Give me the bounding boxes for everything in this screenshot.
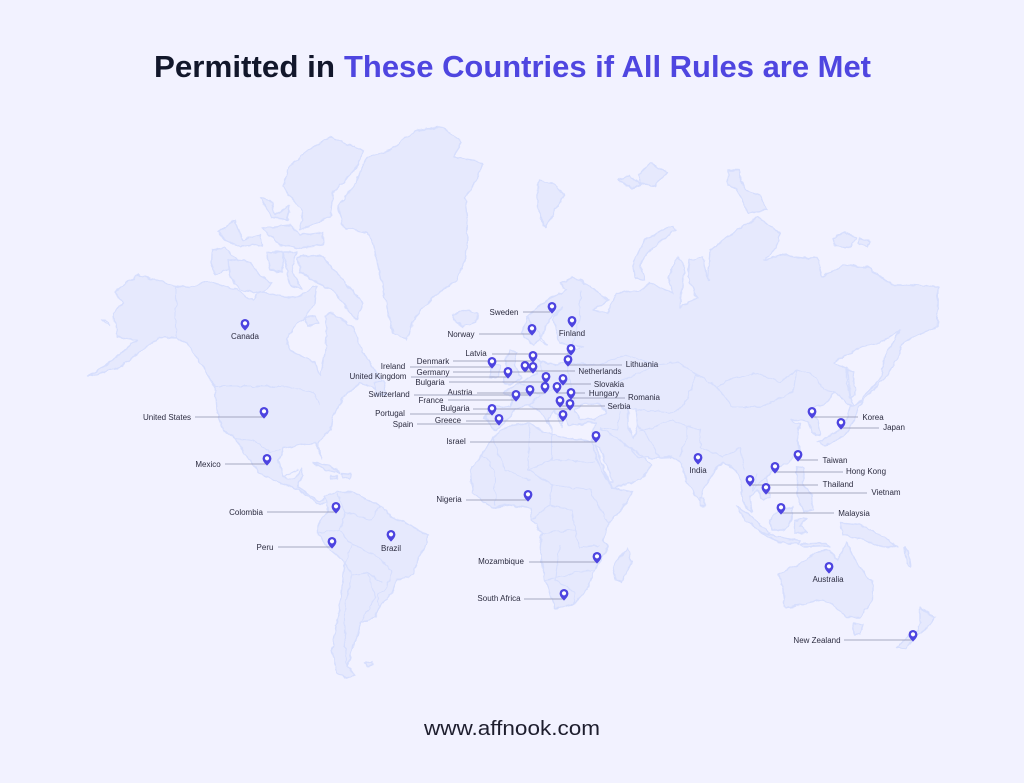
marker: Denmark <box>417 351 537 366</box>
marker: Mozambique <box>478 552 601 566</box>
marker: India: India <box>689 466 707 475</box>
marker: Sweden <box>490 302 556 317</box>
marker: Brazil: Brazil <box>381 544 401 553</box>
marker: Colombia: Colombia <box>229 508 263 517</box>
marker: Thailand: Thailand <box>823 480 853 489</box>
marker: Portugal <box>375 404 496 418</box>
marker: Germany: Germany <box>417 368 449 377</box>
marker: Brazil <box>381 530 401 553</box>
landmass: Southeast Asia islands <box>700 467 911 567</box>
marker: Taiwan: Taiwan <box>823 456 847 465</box>
marker: Malaysia: Malaysia <box>838 509 870 518</box>
marker: Korea: Korea <box>862 413 884 422</box>
landmass: Madagascar <box>613 548 631 582</box>
marker: Lithuania: Lithuania <box>626 360 659 369</box>
marker: Colombia <box>229 502 340 517</box>
marker: New Zealand <box>793 630 917 645</box>
marker: Portugal: Portugal <box>375 409 405 418</box>
marker: Japan <box>837 418 905 432</box>
marker: Thailand <box>746 475 853 489</box>
marker: Spain: Spain <box>393 420 413 429</box>
marker: Korea <box>808 407 884 422</box>
landmass: Falkland Islands <box>365 662 373 666</box>
marker: Bulgaria: Bulgaria <box>415 378 445 387</box>
marker: Finland: Finland <box>559 329 585 338</box>
marker: Vietnam <box>762 483 901 497</box>
marker: Mexico <box>195 454 271 469</box>
marker: Finland <box>559 316 585 338</box>
landmass: European and northern islands <box>453 163 870 398</box>
landmass: Baffin Island and Arctic islands <box>102 137 386 479</box>
marker: South Africa <box>477 589 568 603</box>
marker: Lithuania <box>564 355 659 369</box>
marker: Peru: Peru <box>257 543 273 552</box>
landmass: New Zealand <box>897 607 935 648</box>
marker: Mexico: Mexico <box>195 460 221 469</box>
marker: Netherlands <box>521 361 622 376</box>
water: Caspian Sea <box>628 407 638 438</box>
marker: Israel: Israel <box>446 437 466 446</box>
landmass: Tasmania <box>853 624 863 635</box>
water: Sea of Okhotsk <box>833 330 900 407</box>
marker: Slovakia <box>559 374 625 389</box>
marker: Canada <box>231 319 260 341</box>
marker: Serbia: Serbia <box>607 402 631 411</box>
country borders <box>176 286 835 667</box>
marker: Switzerland <box>368 385 534 399</box>
marker: United States <box>143 407 268 422</box>
marker: Vietnam: Vietnam <box>871 488 901 497</box>
marker: Latvia <box>465 344 575 358</box>
marker: Canada: Canada <box>231 332 260 341</box>
landmass: South America <box>318 492 428 678</box>
marker: Serbia <box>556 396 631 411</box>
marker: Bulgaria <box>440 399 574 413</box>
marker: Taiwan <box>794 450 847 465</box>
marker: Sweden: Sweden <box>490 308 518 317</box>
title: Permitted in <box>154 49 335 84</box>
water: Black Sea <box>575 403 607 419</box>
landmass: North and Central America <box>87 275 385 505</box>
marker: Norway: Norway <box>447 330 475 339</box>
marker: Spain <box>393 414 503 429</box>
marker: Switzerland: Switzerland <box>368 390 410 399</box>
marker: Mozambique: Mozambique <box>478 557 524 566</box>
world map <box>87 127 938 678</box>
marker: Peru <box>257 537 336 552</box>
marker: Nigeria <box>436 490 532 504</box>
marker: India <box>689 453 707 475</box>
marker: Norway <box>447 324 536 339</box>
marker: France: France <box>419 396 444 405</box>
marker: Germany <box>417 362 537 377</box>
marker: Australia <box>812 562 844 584</box>
footer url: www.affnook.com <box>423 718 600 740</box>
marker: Israel <box>446 431 600 446</box>
landmass: Africa <box>470 423 633 608</box>
marker: Hong Kong: Hong Kong <box>846 467 886 476</box>
marker: Denmark: Denmark <box>417 357 450 366</box>
landmass: Greenland <box>338 127 482 340</box>
title: These Countries if All Rules are Met <box>344 49 871 84</box>
marker: Austria: Austria <box>448 388 473 397</box>
landmass: Japan <box>818 400 863 445</box>
marker: Hong Kong <box>771 462 886 476</box>
marker: Australia: Australia <box>812 575 844 584</box>
marker: Japan: Japan <box>883 423 905 432</box>
marker: Bulgaria: Bulgaria <box>440 404 470 413</box>
marker: Romania <box>567 388 661 402</box>
marker: Greece <box>435 410 567 425</box>
marker: Ireland <box>381 357 496 371</box>
landmass: Eurasia <box>485 217 938 513</box>
marker: Bulgaria <box>415 372 550 387</box>
marker: Ireland: Ireland <box>381 362 405 371</box>
marker: Slovakia: Slovakia <box>594 380 625 389</box>
marker: United Kingdom: United Kingdom <box>350 372 407 381</box>
marker: Malaysia <box>777 503 870 518</box>
marker: Nigeria: Nigeria <box>436 495 462 504</box>
marker: Hungary: Hungary <box>589 389 619 398</box>
marker: United States: United States <box>143 413 191 422</box>
marker: South Africa: South Africa <box>477 594 521 603</box>
marker: Hungary <box>553 382 619 398</box>
marker: Greece: Greece <box>435 416 462 425</box>
marker: France <box>419 390 520 405</box>
marker: Latvia: Latvia <box>465 349 487 358</box>
landmass: Australia <box>779 543 873 617</box>
marker: United Kingdom <box>350 367 512 381</box>
marker: Austria <box>448 382 549 397</box>
marker: Romania: Romania <box>628 393 661 402</box>
marker: Netherlands: Netherlands <box>578 367 622 376</box>
water: Red Sea <box>595 445 613 482</box>
marker: New Zealand: New Zealand <box>793 636 841 645</box>
